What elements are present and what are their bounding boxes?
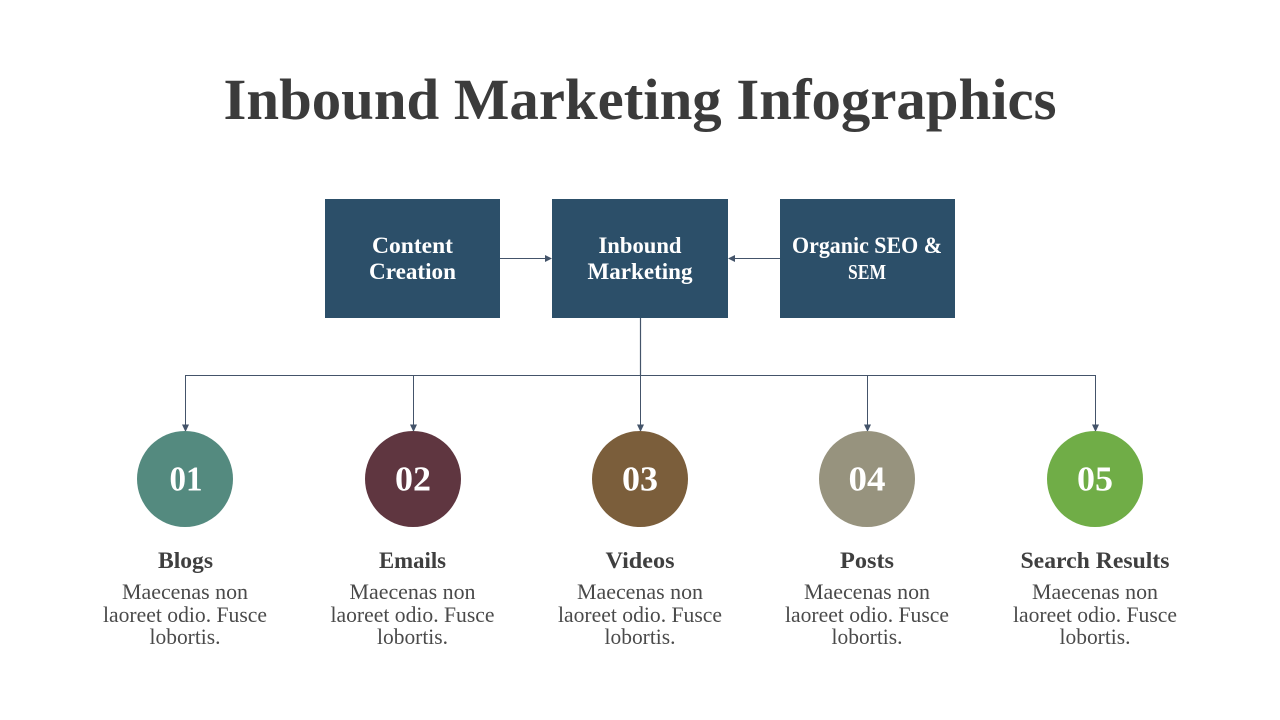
text: Search Results description	[1013, 579, 1177, 649]
text: Emails description: Maecenas non	[350, 579, 476, 604]
box: Organic SEO and SEM: Organic SEO &	[792, 233, 942, 259]
text: Posts description	[785, 579, 949, 649]
box: Organic SEO and SEM	[780, 199, 955, 318]
icon: circle 04: 04	[848, 460, 886, 498]
text: Emails description	[330, 579, 494, 649]
text: Blogs description	[103, 579, 267, 649]
text: Search Results description: laoreet odio. Fusce	[1013, 602, 1177, 627]
text: Blogs description: Maecenas non	[122, 579, 248, 604]
icon: circle 05	[1047, 431, 1143, 527]
box: Content Creation: Content	[372, 233, 453, 259]
item 02: Emails	[330, 431, 494, 649]
icon: circle 01: 01	[170, 460, 202, 498]
icon: circle 01	[137, 431, 233, 527]
icon: circle 02: 02	[395, 460, 431, 498]
text: Posts description: laoreet odio. Fusce	[785, 602, 949, 627]
item 04: Posts	[785, 431, 949, 649]
icon: circle 02	[365, 431, 461, 527]
label: Blogs: Blogs	[158, 548, 213, 573]
box: Organic SEO and SEM: SEM	[848, 260, 886, 284]
text: Emails description: laoreet odio. Fusce	[330, 602, 494, 627]
item 03: Videos	[558, 431, 722, 649]
icon: circle 05: 05	[1077, 460, 1113, 498]
item 01: Blogs	[103, 431, 267, 649]
text: Videos description: lobortis.	[604, 624, 676, 649]
label: Search Results: Search Results	[1020, 548, 1170, 573]
box: Content Creation	[325, 199, 500, 318]
item 05: Search Results	[1013, 431, 1177, 649]
text: Search Results description: Maecenas non	[1032, 579, 1158, 604]
text: Posts description: Maecenas non	[804, 579, 930, 604]
text: Posts description: lobortis.	[832, 624, 902, 649]
box: Inbound Marketing: Inbound	[598, 233, 682, 259]
icon: circle 03	[592, 431, 688, 527]
box: Inbound Marketing	[552, 199, 728, 318]
arrow: Content Creation to Inbound Marketing	[500, 255, 552, 262]
text: Videos description	[558, 579, 722, 649]
text: Blogs description: lobortis.	[150, 624, 220, 649]
text: Videos description: Maecenas non	[577, 579, 703, 604]
text: Blogs description: laoreet odio. Fusce	[103, 602, 267, 627]
title: Inbound Marketing Infographics	[224, 67, 1056, 132]
icon: circle 04	[819, 431, 915, 527]
arrow: Organic SEO to Inbound Marketing	[728, 255, 780, 262]
label: Emails: Emails	[379, 548, 446, 573]
box: Content Creation: Creation	[369, 259, 456, 285]
box: Inbound Marketing: Marketing	[588, 259, 693, 285]
text: Emails description: lobortis.	[377, 624, 448, 649]
label: Videos: Videos	[606, 548, 675, 573]
label: Posts: Posts	[840, 548, 894, 573]
text: Videos description: laoreet odio. Fusce	[558, 602, 722, 627]
connector: tree from Inbound Marketing to five circles	[182, 318, 1099, 432]
icon: circle 03: 03	[622, 460, 658, 498]
text: Search Results description: lobortis.	[1060, 624, 1130, 649]
